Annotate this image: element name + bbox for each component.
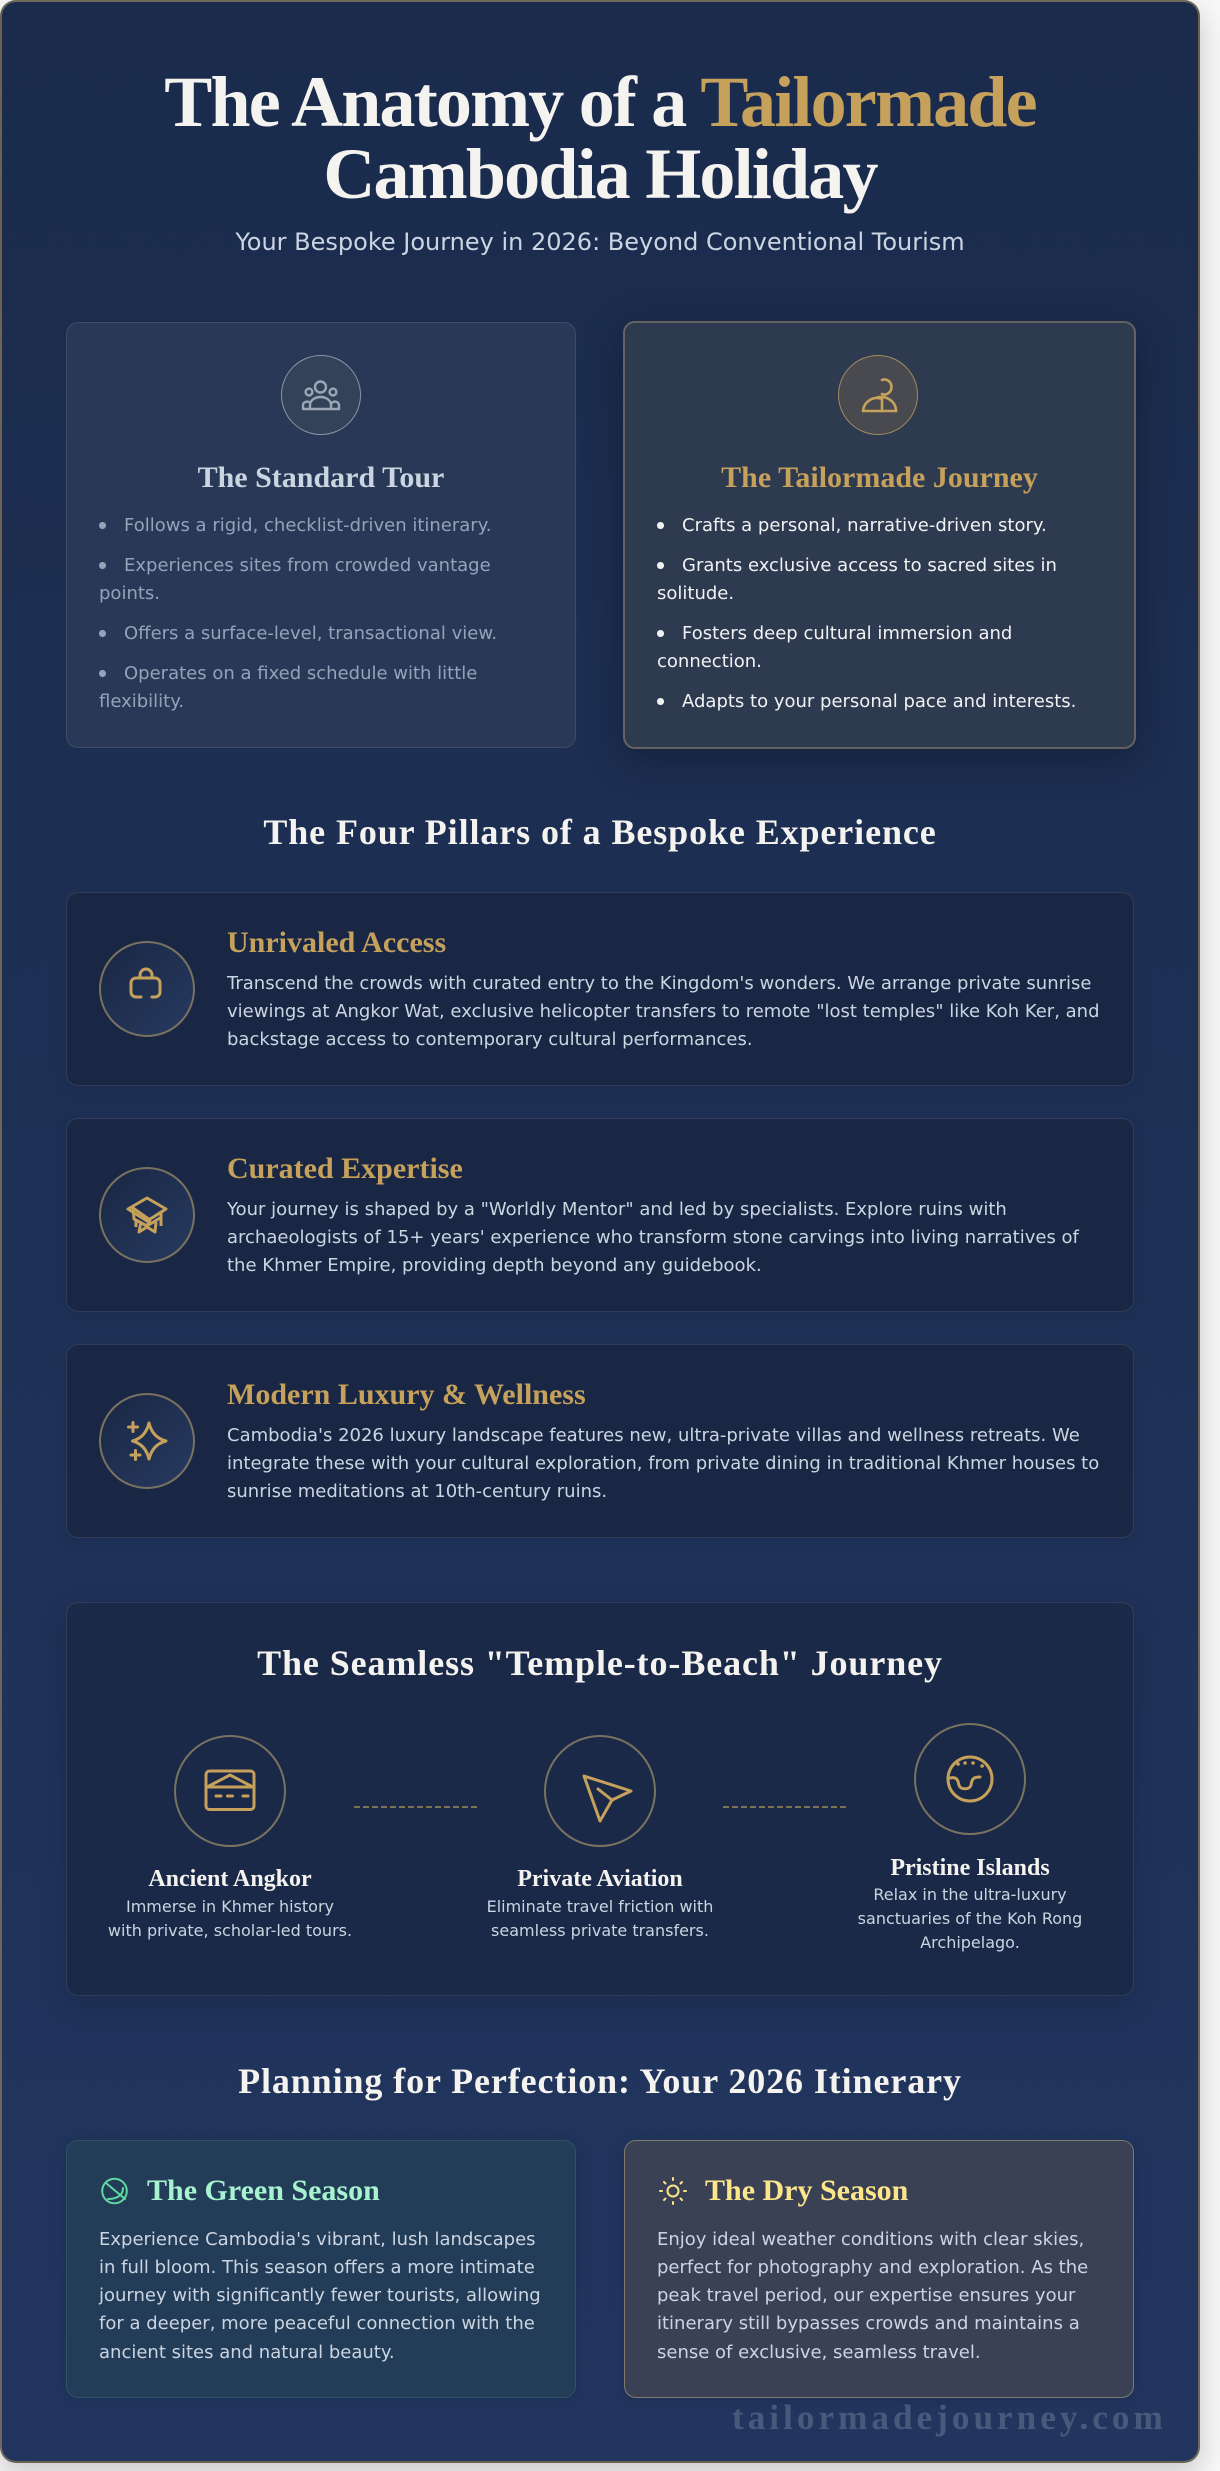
text: dry season: [657, 2229, 1088, 2363]
list: tailormade journey traits: solitude.: [657, 583, 734, 604]
label: private aviation: Private Aviation: [517, 1866, 683, 1892]
text: ancient angkor: Immerse in Khmer history: [126, 1897, 334, 1916]
watermark: tailormadejourney.com: [732, 2398, 1167, 2437]
text: ancient angkor: with private, scholar-led tours.: [108, 1921, 352, 1940]
icon: bag lock: [99, 941, 195, 1037]
text: dry season: perfect for photography and exploration. As the: [657, 2257, 1088, 2278]
title: The Anatomy of a Tailormade: [164, 62, 1036, 142]
text: pristine islands: Archipelago.: [920, 1933, 1020, 1952]
heading: the tailormade journey: The Tailormade Journey: [721, 460, 1038, 494]
list: standard tour traits: [99, 515, 497, 712]
heading: modern luxury and wellness: Modern Luxury & Wellness: [227, 1378, 586, 1411]
text: green season: Experience Cambodia's vibrant, lush landscapes: [99, 2229, 536, 2250]
text: dry season: sense of exclusive, seamless travel.: [657, 2342, 981, 2363]
text: curated expertise: the Khmer Empire, providing depth beyond any guidebook.: [227, 1255, 762, 1276]
arrow: dashed connector two: [723, 1806, 846, 1808]
list: tailormade journey traits: [657, 515, 1076, 712]
text: unrivaled access: Transcend the crowds with curated entry to the Kingdom's wonders. We arrange private sunrise: [227, 972, 1091, 994]
list: tailormade journey traits: Fosters deep cultural immersion and: [682, 623, 1012, 644]
text: curated expertise: [227, 1198, 1080, 1276]
text: modern luxury and wellness: [227, 1424, 1099, 1502]
text: dry season: Enjoy ideal weather conditions with clear skies,: [657, 2229, 1084, 2250]
panel: green season: [66, 2140, 576, 2398]
title: Cambodia Holiday: [323, 134, 877, 214]
heading: planning for perfection: Planning for Perfection: Your 2026 Itinerary: [238, 2061, 962, 2101]
panel: unrivaled access: [66, 892, 1134, 1086]
text: green season: journey with significantly fewer tourists, allowing: [99, 2285, 541, 2306]
text: unrivaled access: backstage access to contemporary cultural performances.: [227, 1029, 753, 1050]
text: modern luxury and wellness: Cambodia's 2026 luxury landscape features new, ultra-private villas and wellness retreats. We: [227, 1424, 1080, 1446]
text: modern luxury and wellness: integrate these with your cultural exploration, from private dining in traditional Khmer houses to: [227, 1453, 1099, 1474]
text: pristine islands: Relax in the ultra-luxury: [873, 1885, 1067, 1904]
icon: temple box: [174, 1735, 286, 1847]
text: modern luxury and wellness: sunrise meditations at 10th-century ruins.: [227, 1481, 607, 1502]
text: green season: ancient sites and natural beauty.: [99, 2342, 395, 2363]
arrow: dashed connector one: [354, 1806, 477, 1808]
panel: dry season: [624, 2140, 1134, 2398]
subtitle: Your Bespoke Journey in 2026: Beyond Conventional Tourism: [235, 228, 965, 256]
icon: leaf in circle: [101, 2178, 128, 2204]
text: unrivaled access: viewings at Angkor Wat, exclusive helicopter transfers to remote "lost temples" like Koh Ker, and: [227, 1001, 1100, 1022]
panel: curated expertise: [66, 1118, 1134, 1312]
panel: the standard tour: [66, 322, 576, 748]
icon: person with open ring head: [838, 355, 918, 435]
text: green season: [98, 2229, 541, 2363]
list: standard tour traits: flexibility.: [99, 691, 184, 712]
step: pristine islands: [858, 1723, 1082, 1952]
list: tailormade journey traits: Grants exclusive access to sacred sites in: [682, 555, 1057, 576]
panel: the tailormade journey: [623, 321, 1136, 749]
text: private aviation: seamless private transfers.: [491, 1921, 709, 1940]
text: curated expertise: archaeologists of 15+ years' experience who transform stone carvings into living narratives of: [227, 1227, 1079, 1248]
icon: paper plane: [544, 1735, 656, 1847]
heading: curated expertise: Curated Expertise: [227, 1152, 463, 1184]
text: dry season: peak travel period, our expertise ensures your: [657, 2285, 1075, 2306]
icon: group of people: [281, 355, 361, 435]
list: tailormade journey traits: connection.: [657, 651, 762, 672]
text: unrivaled access: [226, 972, 1100, 1050]
text: curated expertise: Your journey is shaped by a "Worldly Mentor" and led by specialists. Explore ruins with: [227, 1198, 1007, 1220]
list: standard tour traits: Experiences sites from crowded vantage: [124, 555, 491, 576]
title: [164, 62, 1036, 214]
list: standard tour traits: Offers a surface-level, transactional view.: [124, 623, 497, 644]
list: tailormade journey traits: Crafts a personal, narrative-driven story.: [682, 515, 1047, 536]
text: green season: in full bloom. This season offers a more intimate: [99, 2257, 535, 2278]
text: dry season: itinerary still bypasses crowds and maintains a: [657, 2313, 1080, 2334]
panel: temple to beach journey: [66, 1602, 1134, 1996]
text: pristine islands: sanctuaries of the Koh Rong: [858, 1909, 1082, 1928]
list: standard tour traits: points.: [99, 583, 160, 604]
icon: island globe: [914, 1723, 1026, 1835]
list: tailormade journey traits: Adapts to your personal pace and interests.: [682, 691, 1076, 712]
heading: four pillars: The Four Pillars of a Bespoke Experience: [263, 812, 937, 852]
heading: the standard tour: The Standard Tour: [198, 460, 444, 494]
heading: temple to beach journey: The Seamless "Temple-to-Beach" Journey: [257, 1643, 943, 1683]
list: standard tour traits: Operates on a fixed schedule with little: [124, 663, 477, 684]
icon: sun: [659, 2177, 687, 2205]
label: pristine islands: Pristine Islands: [890, 1855, 1050, 1881]
heading: the green season: The Green Season: [147, 2174, 380, 2207]
text: green season: for a deeper, more peaceful connection with the: [99, 2313, 535, 2334]
icon: graduation cap: [99, 1167, 195, 1263]
panel: modern luxury and wellness: [66, 1344, 1134, 1538]
icon: sparkles: [99, 1393, 195, 1489]
list: standard tour traits: Follows a rigid, checklist-driven itinerary.: [124, 515, 492, 536]
step: private aviation: [487, 1735, 713, 1940]
step: ancient angkor: [108, 1735, 352, 1940]
heading: the dry season: The Dry Season: [705, 2174, 908, 2207]
text: ancient angkor: [108, 1897, 352, 1940]
text: private aviation: [487, 1897, 713, 1940]
heading: unrivaled access: Unrivaled Access: [227, 926, 446, 958]
text: private aviation: Eliminate travel friction with: [487, 1897, 713, 1916]
text: pristine islands: [858, 1885, 1082, 1952]
label: ancient angkor: Ancient Angkor: [148, 1866, 312, 1892]
